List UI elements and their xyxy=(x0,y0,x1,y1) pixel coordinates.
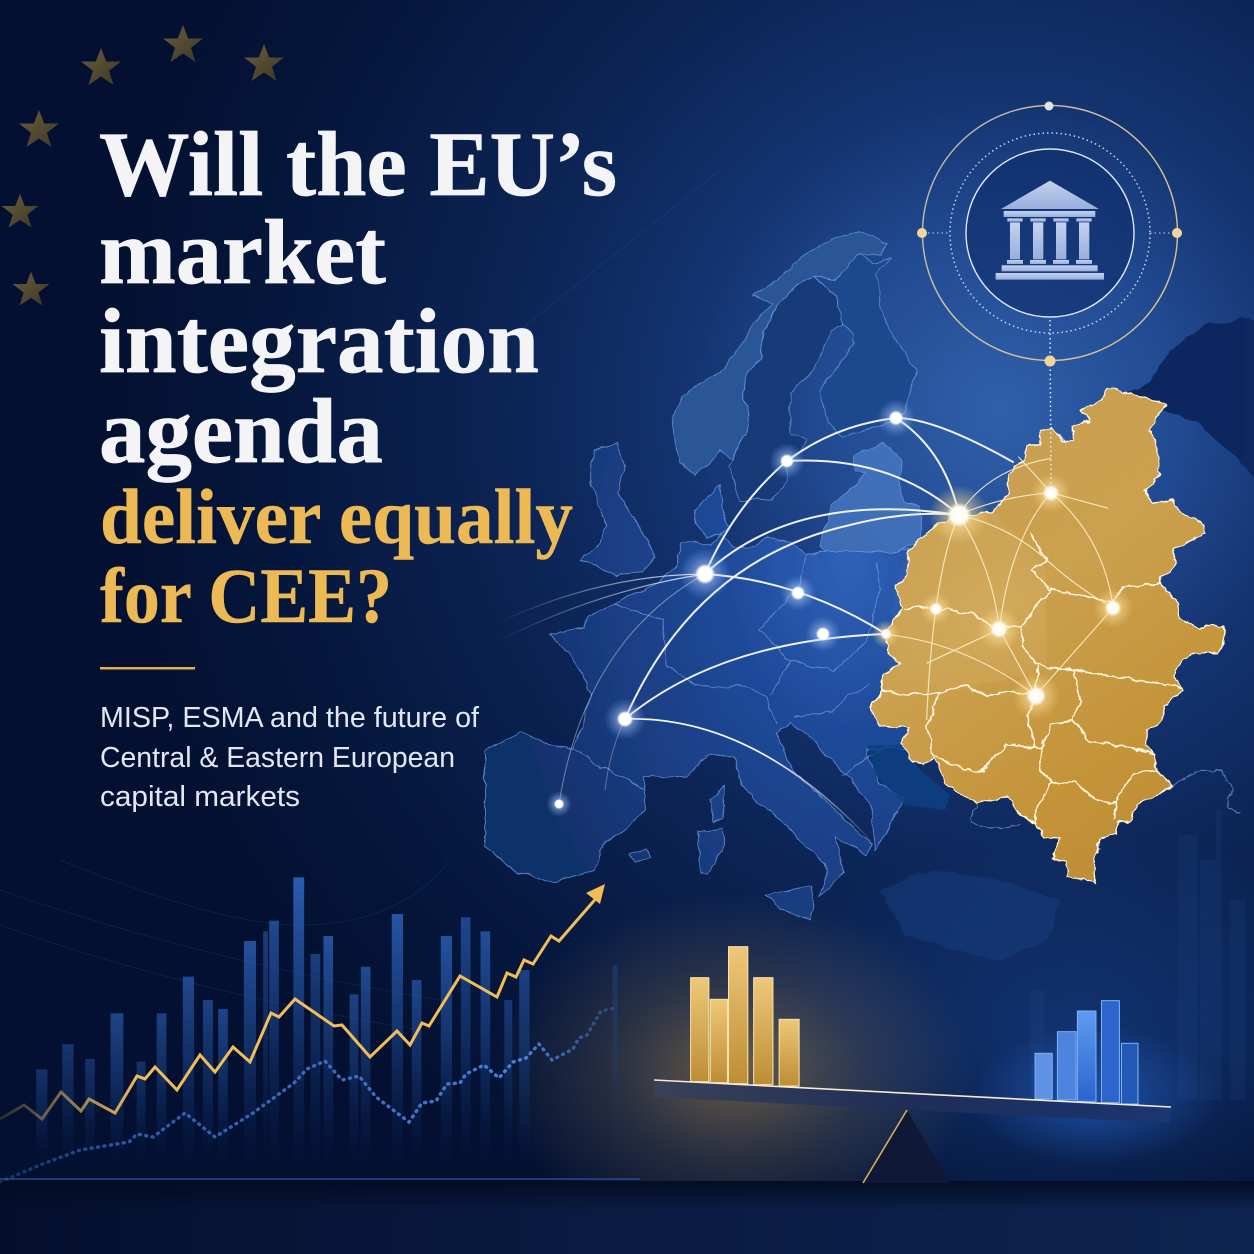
fulcrum xyxy=(863,1110,950,1183)
regional borders xyxy=(882,533,1183,823)
gold silhouette xyxy=(870,388,1227,882)
title: market xyxy=(99,201,386,303)
subtitle: Central & Eastern European xyxy=(100,742,455,774)
gold bars xyxy=(691,947,799,1086)
outline of land beyond CEE xyxy=(972,770,1240,830)
internal borders xyxy=(575,556,880,788)
Mediterranean islands xyxy=(630,786,813,921)
Denmark xyxy=(695,485,730,538)
map: Europe xyxy=(485,444,920,921)
map: sea patch xyxy=(868,745,950,810)
glow and floor behind the seesaw xyxy=(0,895,1254,1254)
gold network arcs xyxy=(886,457,1113,720)
title: agenda xyxy=(99,380,383,482)
gold trend line xyxy=(0,895,599,1119)
faint background arcs xyxy=(0,170,720,1030)
chart bars xyxy=(36,877,618,1160)
subtitle xyxy=(100,702,480,813)
Norway xyxy=(673,232,887,475)
subtitle: MISP, ESMA and the future of xyxy=(100,702,480,734)
Baltics and Belarus highlight xyxy=(820,444,920,558)
beam xyxy=(654,1080,1171,1123)
network nodes xyxy=(546,399,1133,817)
network lines xyxy=(500,418,1013,845)
lower right blue wash xyxy=(732,830,1254,1250)
outer ring xyxy=(922,106,1178,360)
title: deliver equally xyxy=(100,473,573,560)
CEE gold map xyxy=(870,388,1227,882)
title xyxy=(99,113,617,639)
Finland xyxy=(813,253,917,437)
gold highlight xyxy=(882,512,1047,693)
accent rule xyxy=(100,667,195,670)
arrowhead xyxy=(586,884,605,904)
faint right-side chart xyxy=(1030,810,1246,1100)
ring nodes xyxy=(917,102,1182,366)
stars: EU ring xyxy=(2,25,284,306)
map: Scandinavia xyxy=(673,232,917,500)
dotted ring xyxy=(950,133,1150,333)
UK xyxy=(582,444,655,574)
inner ring xyxy=(966,149,1134,317)
market chart xyxy=(0,877,618,1182)
icon: bank building xyxy=(996,181,1104,280)
title: Will the EU’s xyxy=(99,113,617,215)
Sweden xyxy=(728,277,842,500)
title: for CEE? xyxy=(100,552,392,639)
title: integration xyxy=(99,290,539,392)
blue dotted line xyxy=(0,1008,615,1182)
connector: dotted line to institution xyxy=(1050,320,1051,490)
map: dark land silhouettes xyxy=(880,318,1254,960)
institution emblem xyxy=(917,102,1182,366)
balance scale xyxy=(654,947,1171,1183)
subtitle: capital markets xyxy=(100,781,300,813)
blue bars xyxy=(1035,1001,1138,1104)
Mainland Europe xyxy=(485,533,920,896)
